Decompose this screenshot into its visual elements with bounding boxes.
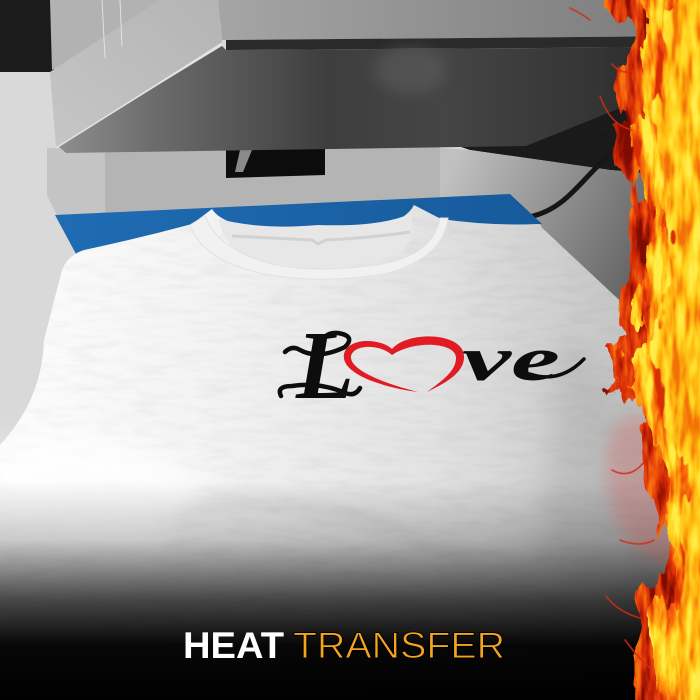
machine: dark platen rim xyxy=(226,36,700,50)
machine: soft reflection on underside xyxy=(374,46,446,94)
shirt: collar rib xyxy=(190,216,448,279)
shirt: neck label stitching xyxy=(232,232,410,244)
fire: red outer flames xyxy=(596,0,700,700)
design: letters ve: ve xyxy=(462,326,560,394)
machine: lower body xyxy=(47,142,440,225)
design: L flourish xyxy=(280,333,360,396)
printed design: Love xyxy=(280,312,584,420)
heat press machine xyxy=(47,0,700,225)
machine: front of platen xyxy=(218,0,700,40)
title: HEAT TRANSFER xyxy=(183,625,505,666)
machine: body shade xyxy=(47,148,105,225)
machine: dark slot xyxy=(226,146,325,178)
blue heat press board xyxy=(55,194,542,254)
bottom dark fade xyxy=(0,480,700,700)
shirt: soft fold shadow xyxy=(540,330,680,600)
machine: panel seams xyxy=(102,0,122,58)
shirt: inside back neck xyxy=(219,214,413,267)
shirt: bright drape on left xyxy=(0,435,210,560)
title: TRANSFER in orange: TRANSFER xyxy=(293,625,505,666)
fire: red wisps and embers xyxy=(570,8,654,668)
machine: slot highlight xyxy=(235,150,252,172)
machine: angled side of platen xyxy=(50,0,222,148)
title: HEAT in white: HEAT xyxy=(183,625,284,666)
shirt: body xyxy=(0,205,700,700)
design: red heart xyxy=(344,336,464,392)
t-shirt xyxy=(0,205,671,608)
background: dark recess behind press xyxy=(440,50,700,178)
machine: rear column xyxy=(50,0,160,70)
power cable xyxy=(533,158,606,216)
fire: orange and yellow flames xyxy=(616,0,700,700)
design: letter L: L xyxy=(295,312,354,420)
background: right wall xyxy=(440,148,700,560)
fire: bright yellow core xyxy=(646,0,700,700)
fire: wisp lines xyxy=(570,8,654,668)
fire border on right edge xyxy=(570,0,700,700)
fire: pink smoke haze xyxy=(607,415,680,570)
machine: light edge of platen xyxy=(56,44,222,148)
background: dark upper left corner xyxy=(0,0,54,72)
design: e tail flourish xyxy=(530,359,584,377)
shirt: fabric texture xyxy=(89,300,340,462)
shirt: lower wrinkle xyxy=(150,502,470,560)
machine: platen underside xyxy=(58,46,700,153)
